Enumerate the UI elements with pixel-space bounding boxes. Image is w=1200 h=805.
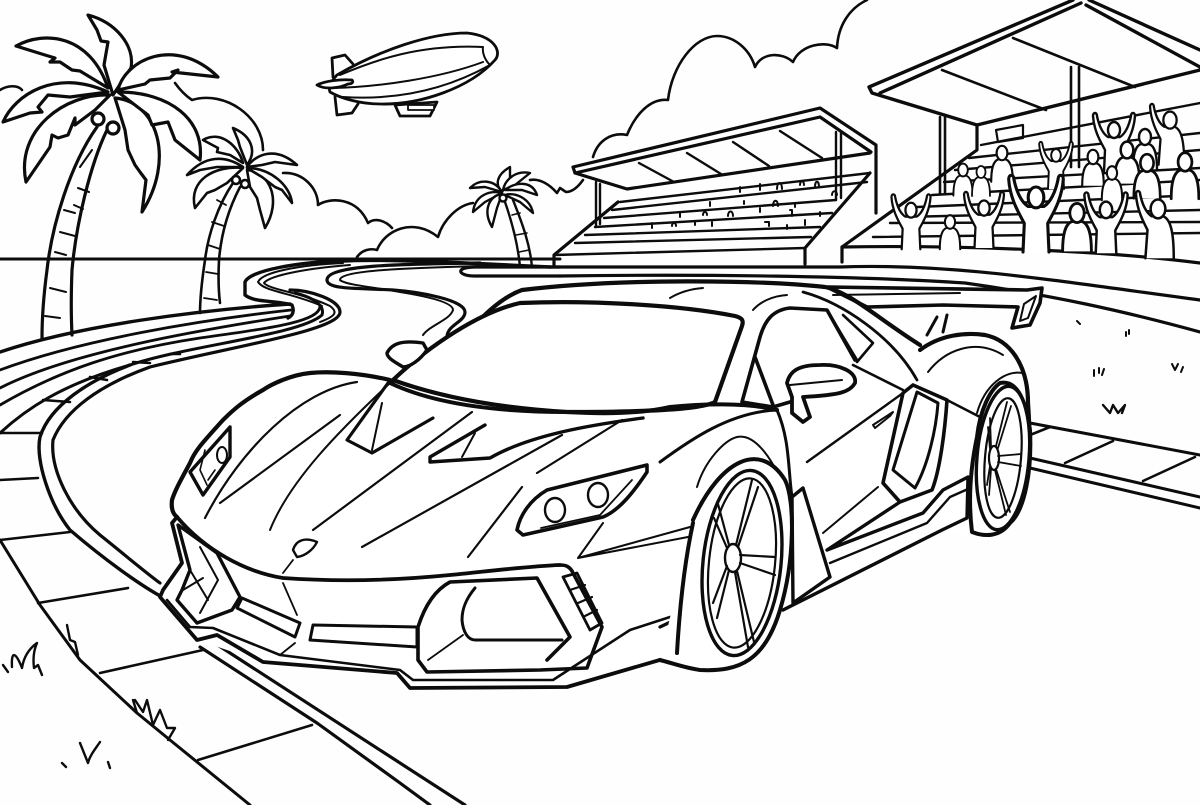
palm tree far	[470, 167, 537, 267]
left side road edges	[0, 304, 290, 352]
nose line	[177, 517, 560, 580]
door crease	[807, 393, 903, 462]
roof ribs	[942, 38, 1135, 110]
tail plane	[317, 80, 353, 88]
clouds	[0, 0, 867, 257]
side skirt	[783, 477, 968, 610]
envelope	[329, 33, 498, 104]
hood scoop	[347, 383, 433, 453]
roof frame	[869, 0, 1200, 125]
windshield	[393, 302, 743, 412]
hood creases	[205, 382, 622, 557]
trunk	[42, 127, 107, 338]
inner winding road	[327, 263, 480, 337]
front intake	[418, 565, 602, 672]
rear arch line	[977, 373, 1023, 413]
roof	[573, 108, 876, 213]
outer road lines right	[550, 266, 1200, 300]
bark marks	[45, 150, 92, 318]
posts	[596, 132, 841, 227]
rear wing	[827, 287, 1042, 335]
front rows	[1063, 203, 1091, 251]
grandstand left	[554, 108, 876, 266]
white body silhouette	[160, 287, 1028, 688]
envelope panel lines	[332, 47, 490, 98]
spectators	[652, 181, 837, 229]
rear wheel	[970, 383, 1035, 535]
front wheel	[660, 459, 792, 670]
front side panel	[660, 615, 685, 660]
blimp	[317, 33, 498, 116]
side mirror far	[387, 342, 427, 367]
bumper bars	[237, 598, 300, 637]
back rows	[1133, 129, 1157, 169]
front fender lines	[660, 410, 792, 497]
posts	[940, 67, 1079, 193]
lower left track edges	[0, 540, 250, 805]
front grille	[177, 525, 240, 623]
hood top edge	[390, 383, 777, 413]
coconuts	[92, 113, 104, 125]
side window	[742, 308, 855, 407]
gondola	[395, 102, 437, 116]
grandstand right	[842, 0, 1200, 263]
far track band	[245, 260, 550, 318]
track cross ties	[0, 354, 312, 760]
horizon	[0, 258, 560, 260]
race track	[0, 260, 1200, 805]
side intake	[883, 385, 947, 502]
rear fender	[920, 334, 1029, 477]
badge crease lines	[280, 560, 297, 655]
hood vent	[430, 418, 643, 462]
side walls	[554, 173, 870, 266]
c-pillar	[830, 315, 873, 362]
near headlight	[517, 465, 647, 535]
fronds	[88, 15, 132, 95]
roof and rear deck	[390, 281, 920, 383]
stand wall	[842, 125, 977, 262]
seating rows	[873, 103, 1200, 237]
lower right track	[1030, 423, 1200, 508]
side crease	[578, 523, 690, 558]
door handle	[873, 412, 893, 428]
side mirror near	[787, 365, 855, 422]
sports car	[160, 281, 1042, 688]
bottom fin	[335, 97, 358, 115]
palm tree middle	[187, 128, 297, 313]
seating rows	[554, 173, 870, 255]
roof ribs	[639, 131, 822, 182]
badge	[293, 540, 317, 557]
near loop edges	[53, 290, 340, 583]
roadside loop end	[461, 267, 560, 276]
front lip	[160, 517, 670, 688]
hood left edge	[172, 372, 390, 517]
palm tree left	[3, 15, 218, 338]
top fin	[332, 55, 353, 77]
far headlight	[190, 427, 230, 495]
scoreboard	[996, 125, 1023, 142]
lower door line	[823, 487, 878, 533]
crowd	[891, 104, 1199, 258]
grass tufts	[3, 321, 1183, 768]
